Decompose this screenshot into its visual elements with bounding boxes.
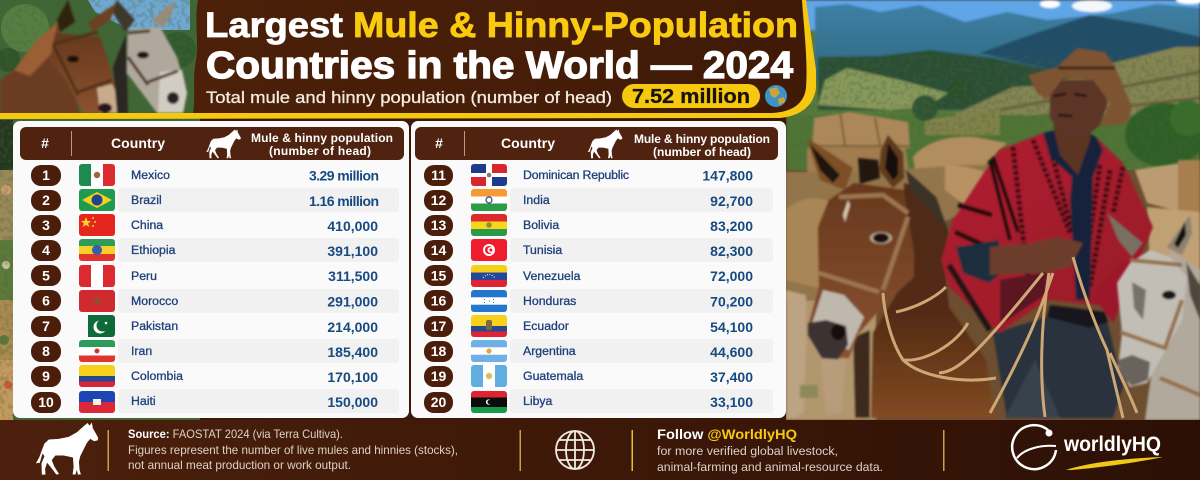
follow call to action: for more verified global livestock, — [657, 444, 838, 458]
source note: not annual meat production or work output. — [128, 458, 351, 472]
row: Dominican Republic — [424, 164, 753, 186]
worldlyHQ logo: worldlyHQ — [1063, 433, 1161, 456]
flag: Dominican Republic — [471, 164, 507, 186]
row: Mexico: 1 — [42, 167, 50, 183]
flag: Morocco — [79, 290, 115, 312]
row: Venezuela: Venezuela — [523, 269, 581, 283]
flag: Ethiopia — [79, 239, 115, 261]
flag: Pakistan — [88, 315, 115, 337]
icon: wireframe globe — [556, 431, 594, 469]
flag: Haiti — [79, 391, 115, 413]
row: Peru: 5 — [42, 268, 50, 284]
row: China: China — [131, 218, 163, 232]
flag: Venezuela — [471, 265, 507, 287]
panel: ranks 11 to 20 — [411, 121, 786, 418]
total pill: 7.52 million — [632, 86, 750, 108]
row: Honduras — [424, 289, 773, 313]
row: China: 410,000 — [327, 218, 378, 234]
flag: China — [79, 214, 115, 236]
poncho — [941, 133, 1153, 333]
photo: Andean farm scene on the right — [786, 0, 1200, 420]
row: Haiti: 10 — [38, 394, 54, 410]
neck — [1053, 125, 1090, 175]
row: Pakistan: 7 — [42, 318, 50, 334]
flag: Bolivia — [471, 214, 507, 236]
shirt — [1043, 130, 1103, 300]
brown mule — [0, 0, 120, 114]
row: Colombia — [31, 365, 378, 387]
title banner — [0, 0, 816, 119]
flag: Iran — [79, 340, 115, 362]
follow call to action: Follow @WorldlyHQ — [657, 427, 797, 442]
table header: Country — [111, 135, 165, 151]
row: Haiti: Haiti — [131, 394, 156, 408]
row: India: 92,700 — [710, 193, 753, 209]
row: Libya: 20 — [431, 394, 446, 410]
row: Guatemala: 19 — [431, 368, 446, 384]
table header: (number of head) — [269, 144, 371, 158]
row: Argentina: Argentina — [523, 344, 576, 358]
grain sacks — [786, 112, 1200, 300]
icon: mule silhouette — [36, 423, 98, 475]
title line 1: Largest — [205, 6, 343, 45]
photo: two mules top-left — [0, 0, 187, 114]
row: Argentina: 18 — [431, 343, 446, 359]
row: Libya: Libya — [523, 394, 553, 408]
table header — [20, 127, 404, 160]
row: Ethiopia: Ethiopia — [131, 243, 176, 257]
row: Morocco: Morocco — [131, 294, 178, 308]
source note: Source: FAOSTAT 2024 (via Terra Cultiva). — [128, 427, 343, 441]
row: Dominican Republic: 11 — [431, 167, 446, 183]
footer bar — [0, 420, 1200, 480]
row: Mexico: 3.29 million — [309, 168, 379, 184]
ground base behind the figures — [786, 170, 1200, 420]
row: Venezuela: 72,000 — [710, 268, 753, 284]
table header: (number of head) — [653, 145, 751, 159]
flag: Argentina — [471, 340, 507, 362]
row: Colombia: 170,100 — [327, 369, 378, 385]
flag: Colombia — [79, 365, 115, 387]
table header: Mule & hinny population — [634, 132, 770, 146]
source note: Figures represent the number of live mules and hinnies (stocks), — [128, 443, 458, 457]
table header: # — [41, 135, 49, 151]
row: Libya — [424, 389, 773, 413]
row: Colombia: 9 — [42, 368, 50, 384]
row: Ethiopia: 4 — [42, 242, 50, 258]
row: India: India — [523, 193, 550, 207]
row: Bolivia — [424, 214, 753, 236]
row: Bolivia: 13 — [431, 217, 446, 233]
row: Honduras: 70,200 — [710, 294, 753, 310]
man in hat and red poncho — [941, 48, 1153, 418]
row: Morocco — [31, 289, 399, 313]
flag: Tunisia — [471, 239, 507, 261]
row: Argentina: 44,600 — [710, 344, 753, 360]
row: Haiti: 150,000 — [327, 394, 378, 410]
row: Brazil — [31, 188, 399, 212]
row: Iran: 8 — [42, 343, 50, 359]
background mule legs and dusty ground — [786, 290, 876, 420]
flag: India — [471, 189, 507, 211]
row: Venezuela: 15 — [431, 268, 446, 284]
source note — [128, 427, 458, 472]
row: Venezuela — [424, 265, 753, 287]
row: Bolivia: Bolivia — [523, 218, 559, 232]
row: Guatemala — [424, 365, 753, 387]
row: Honduras: 16 — [431, 292, 446, 308]
row: Morocco: 6 — [42, 292, 50, 308]
row: Ethiopia: 391,100 — [327, 243, 378, 259]
face — [1050, 80, 1108, 137]
title line 2: Countries in the World — 2024 — [206, 45, 793, 87]
row: Mexico — [31, 164, 379, 186]
row: Pakistan: 214,000 — [327, 319, 378, 335]
worldlyHQ logo — [1012, 425, 1163, 470]
row: Ecuador: 17 — [431, 318, 446, 334]
lead ropes — [883, 257, 1137, 418]
row: Iran — [31, 339, 399, 363]
subtitle: Total mule and hinny population (number of head) — [206, 88, 612, 107]
center brown mule — [807, 135, 995, 418]
row: Brazil: 2 — [42, 192, 50, 208]
row: Brazil: 1.16 million — [309, 193, 379, 209]
follow call to action: animal-farming and animal-resource data. — [657, 460, 883, 474]
row: China — [31, 214, 378, 236]
row: Tunisia: 14 — [431, 242, 446, 258]
row: Ecuador: 54,100 — [710, 319, 753, 335]
row: Iran: Iran — [131, 344, 152, 358]
row: Dominican Republic: Dominican Republic — [523, 168, 629, 182]
row: Colombia: Colombia — [131, 369, 183, 383]
flag: Ecuador — [471, 315, 507, 337]
table header: # — [435, 135, 443, 151]
row: Brazil: Brazil — [131, 193, 162, 207]
right grey mule — [1107, 213, 1200, 420]
icon: earth globe — [765, 85, 787, 107]
row: Mexico: Mexico — [131, 168, 170, 182]
photo: foliage background strip on the left — [0, 0, 200, 420]
row: Guatemala: Guatemala — [523, 369, 583, 383]
panel: ranks 1 to 10 — [13, 121, 409, 418]
hat — [1028, 48, 1132, 126]
row: Pakistan — [31, 315, 378, 337]
row: Peru: 311,500 — [328, 268, 378, 284]
row: Dominican Republic: 147,800 — [702, 168, 753, 184]
row: Pakistan: Pakistan — [131, 319, 178, 333]
row: Tunisia — [424, 238, 773, 262]
row: Iran: 185,400 — [327, 344, 378, 360]
title line 1 highlight: Mule & Hinny-Population — [353, 6, 798, 45]
row: Peru: Peru — [131, 269, 157, 283]
row: Tunisia: Tunisia — [523, 243, 562, 257]
row: Ecuador: Ecuador — [523, 319, 569, 333]
row: Libya: 33,100 — [710, 394, 753, 410]
table header: Mule & hinny population — [251, 131, 393, 145]
row: Argentina — [424, 339, 773, 363]
row: India: 12 — [431, 192, 446, 208]
row: Ecuador — [424, 315, 753, 337]
follow call to action — [657, 427, 883, 474]
table header — [415, 127, 778, 160]
row: Ethiopia — [31, 238, 399, 262]
flag: Honduras — [471, 290, 507, 312]
row: China: 3 — [42, 217, 50, 233]
trousers — [993, 317, 1123, 418]
sky, mountains and hills — [786, 0, 1200, 175]
table header: Country — [501, 135, 555, 151]
row: Haiti — [31, 389, 399, 413]
row: Guatemala: 37,400 — [710, 369, 753, 385]
flag: Libya — [471, 391, 507, 413]
flag: Brazil — [79, 189, 115, 211]
grey mule — [113, 0, 187, 113]
arm and hand — [956, 240, 999, 283]
row: India — [424, 188, 773, 212]
row: Honduras: Honduras — [523, 294, 576, 308]
row: Peru — [31, 265, 378, 287]
row: Tunisia: 82,300 — [710, 243, 753, 259]
row: Morocco: 291,000 — [327, 294, 378, 310]
flag: Peru — [79, 265, 115, 287]
flag: Guatemala — [471, 365, 507, 387]
row: Bolivia: 83,200 — [710, 218, 753, 234]
flag: Mexico — [79, 164, 115, 186]
